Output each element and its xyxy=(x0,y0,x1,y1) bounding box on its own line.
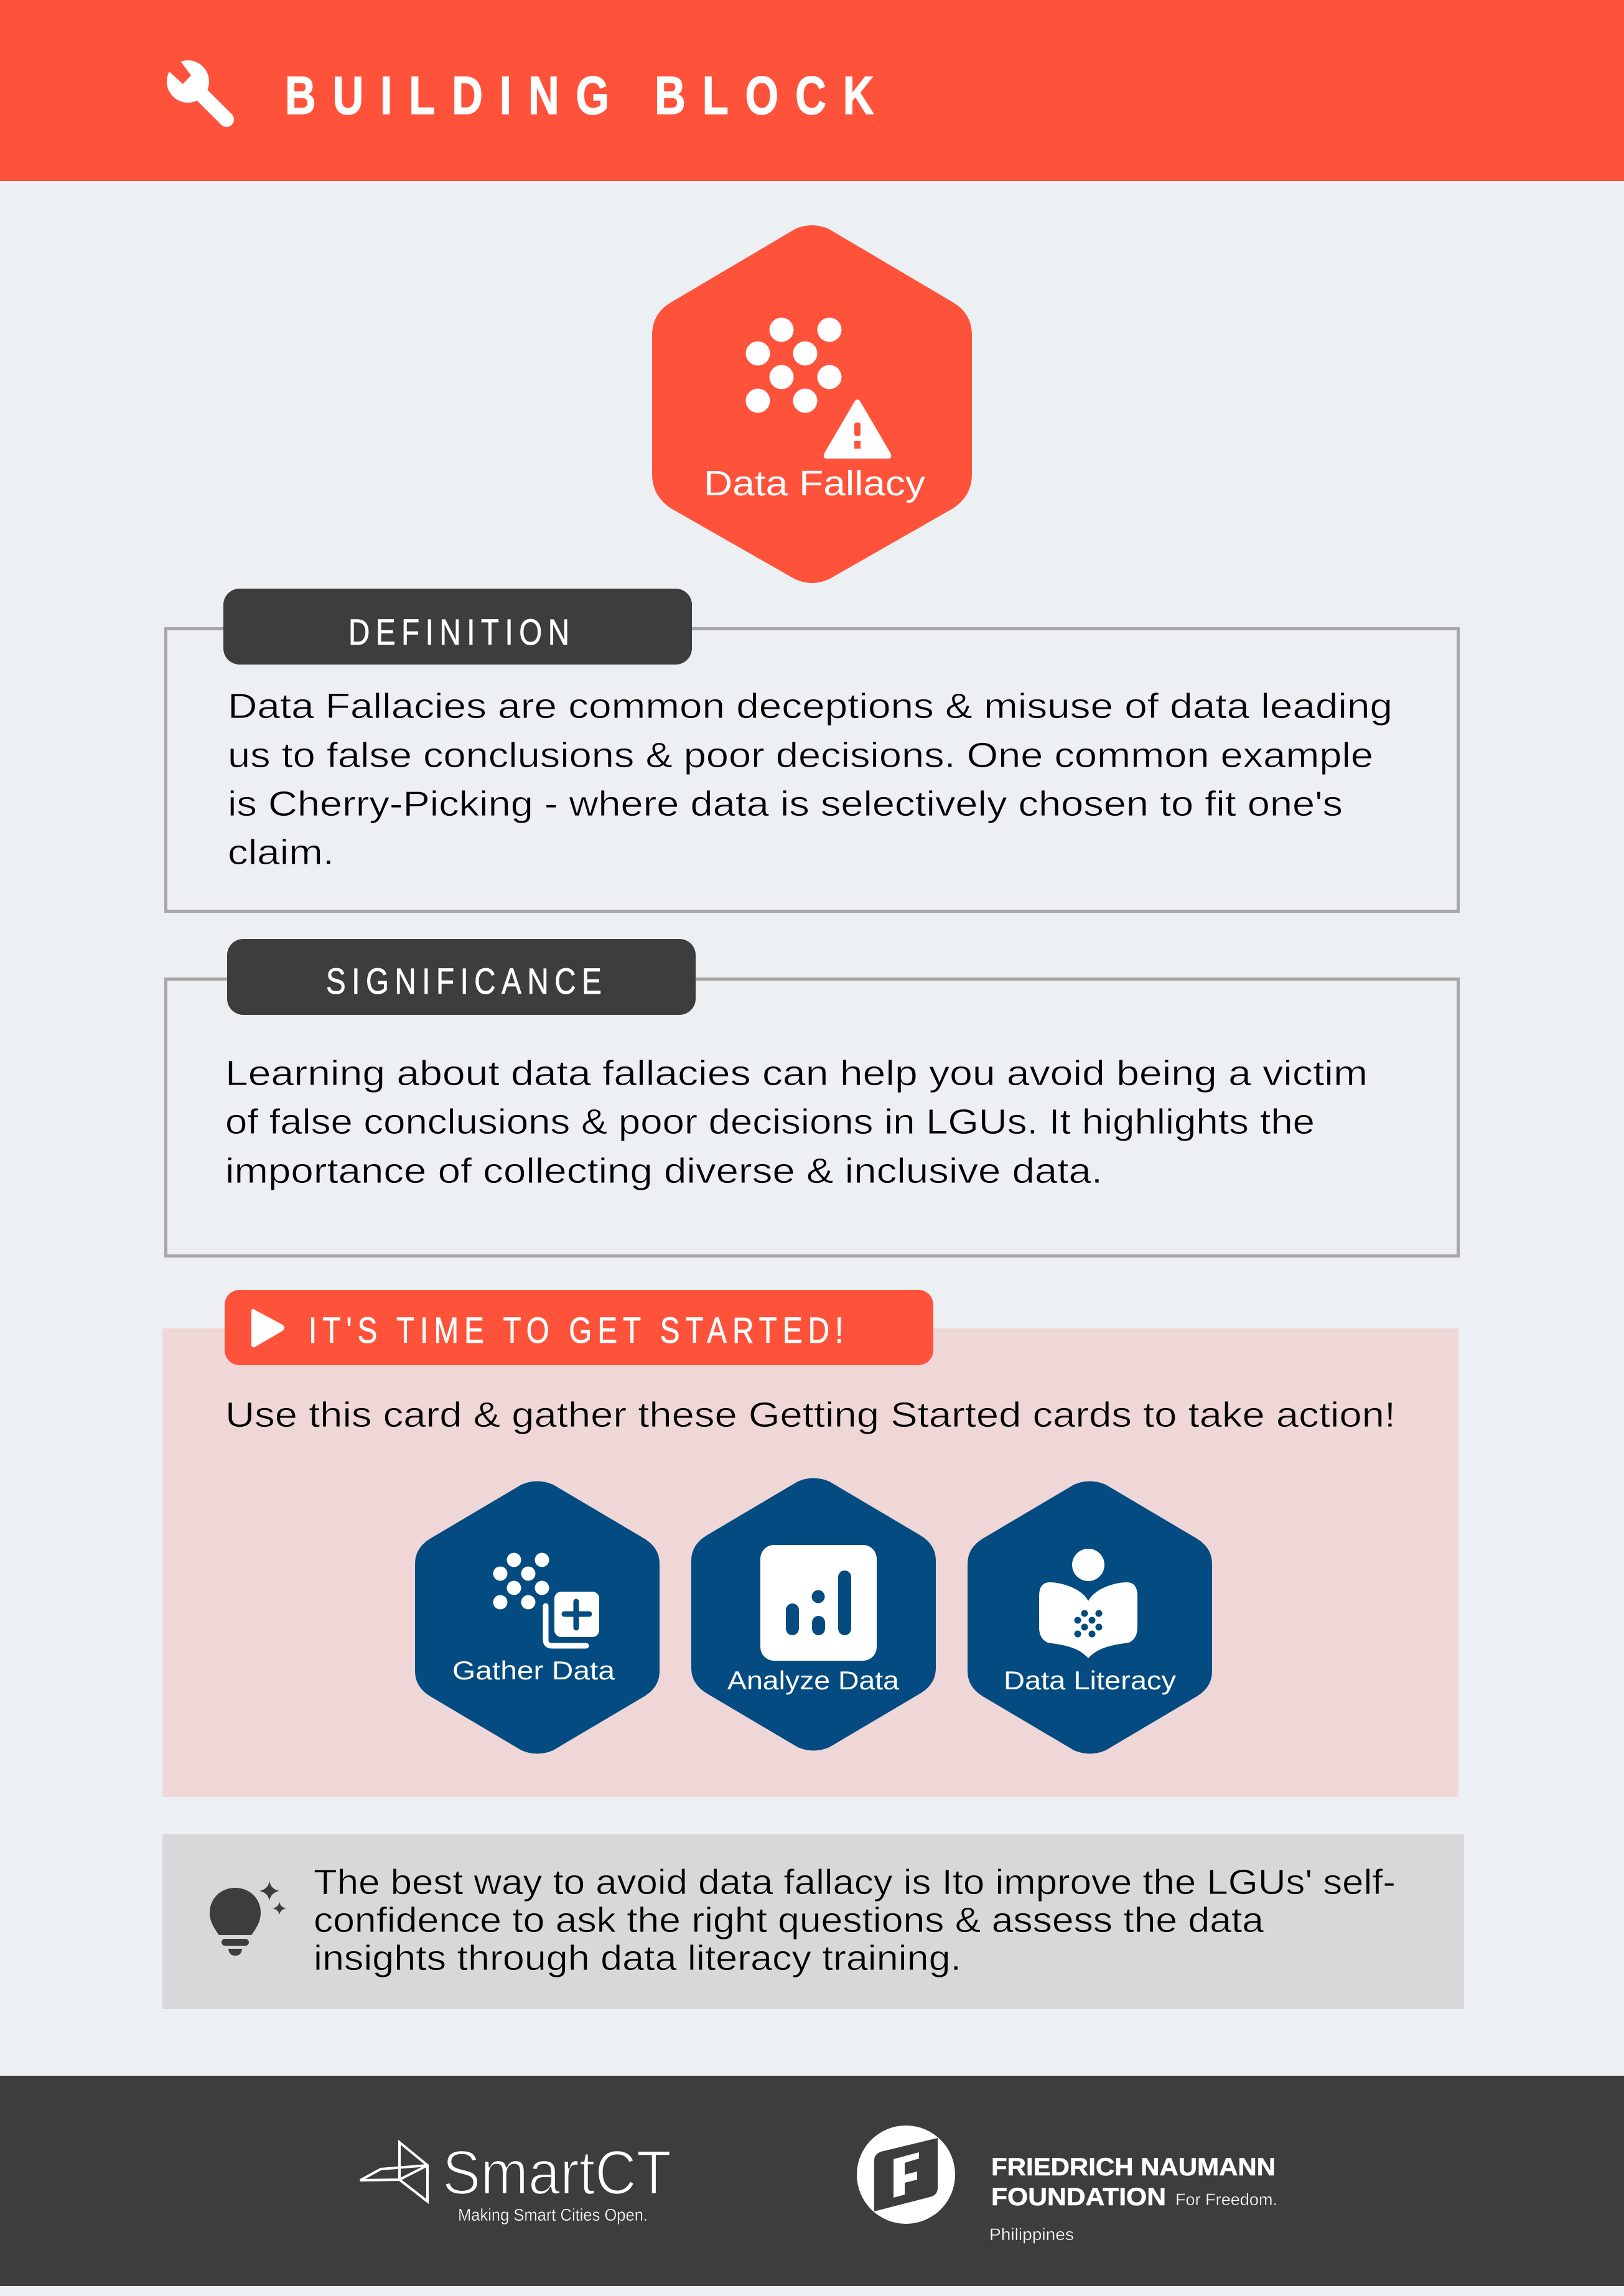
instruction text: Use this card & gather these Getting Started cards to take action! xyxy=(225,1395,1396,1435)
tip text: confidence to ask the right questions & assess the data xyxy=(314,1900,1264,1940)
tip text xyxy=(314,1862,1396,1978)
card: analyze data xyxy=(691,1478,936,1751)
card: gather data xyxy=(415,1481,660,1753)
significance text: importance of collecting diverse & inclusive data. xyxy=(225,1151,1103,1191)
definition text: Data Fallacies are common deceptions & misuse of data leading xyxy=(228,686,1393,726)
logo: Friedrich Naumann Foundation: For Freedom. xyxy=(1175,2190,1277,2209)
panel: significance xyxy=(166,939,1458,1256)
logo: SmartCT: Making Smart Cities Open. xyxy=(458,2205,648,2224)
header banner xyxy=(0,0,1624,181)
card: data literacy xyxy=(968,1481,1212,1753)
panel: getting started xyxy=(162,1290,1458,1797)
icon: bar chart tile xyxy=(760,1545,877,1661)
panel: definition xyxy=(166,589,1458,911)
definition text: us to false conclusions & poor decisions. One common example xyxy=(228,735,1373,775)
icon: wrench xyxy=(164,55,226,119)
logo: Friedrich Naumann Foundation: Philippines xyxy=(989,2225,1074,2244)
badge label: Data Fallacy xyxy=(704,464,926,503)
getting started tab xyxy=(225,1290,933,1365)
heading: building block: BUILDING BLOCK xyxy=(285,66,874,126)
icon: warning triangle xyxy=(824,399,891,459)
badge: data fallacy hexagon xyxy=(652,225,972,583)
icon: light bulb with sparkles xyxy=(210,1881,286,1956)
card: data literacy: Data Literacy xyxy=(1004,1666,1176,1695)
significance text xyxy=(225,1053,1368,1191)
footer xyxy=(0,2076,1624,2286)
significance text: Learning about data fallacies can help you avoid being a victim xyxy=(225,1053,1368,1093)
definition text: is Cherry-Picking - where data is selectively chosen to fit one's xyxy=(228,784,1343,824)
tip text: The best way to avoid data fallacy is Ito improve the LGUs' self- xyxy=(314,1862,1396,1902)
definition text xyxy=(228,686,1393,872)
icon: data dots xyxy=(745,317,841,413)
card: gather data: Gather Data xyxy=(452,1656,615,1685)
icon: play xyxy=(251,1309,284,1347)
icon: reader with book xyxy=(1039,1549,1137,1658)
significance tab: SIGNIFICANCE xyxy=(326,962,602,1002)
logo: Friedrich Naumann Foundation: FRIEDRICH NAUMANN xyxy=(991,2154,1276,2181)
tip text: insights through data literacy training. xyxy=(314,1938,961,1978)
definition text: claim. xyxy=(228,833,334,872)
logo: SmartCT xyxy=(360,2138,671,2224)
getting started tab: IT'S TIME TO GET STARTED! xyxy=(309,1311,843,1351)
logo: Friedrich Naumann Foundation xyxy=(857,2126,1277,2244)
definition tab xyxy=(223,589,692,665)
callout: tip xyxy=(162,1834,1464,2009)
significance text: of false conclusions & poor decisions in LGUs. It highlights the xyxy=(225,1102,1315,1142)
definition tab: DEFINITION xyxy=(348,613,569,653)
icon: data dots with plus xyxy=(493,1553,599,1646)
logo: SmartCT: SmartCT xyxy=(442,2138,671,2208)
logo: Friedrich Naumann Foundation: FOUNDATION xyxy=(991,2183,1166,2211)
card: analyze data: Analyze Data xyxy=(727,1666,900,1695)
significance tab xyxy=(227,939,696,1015)
